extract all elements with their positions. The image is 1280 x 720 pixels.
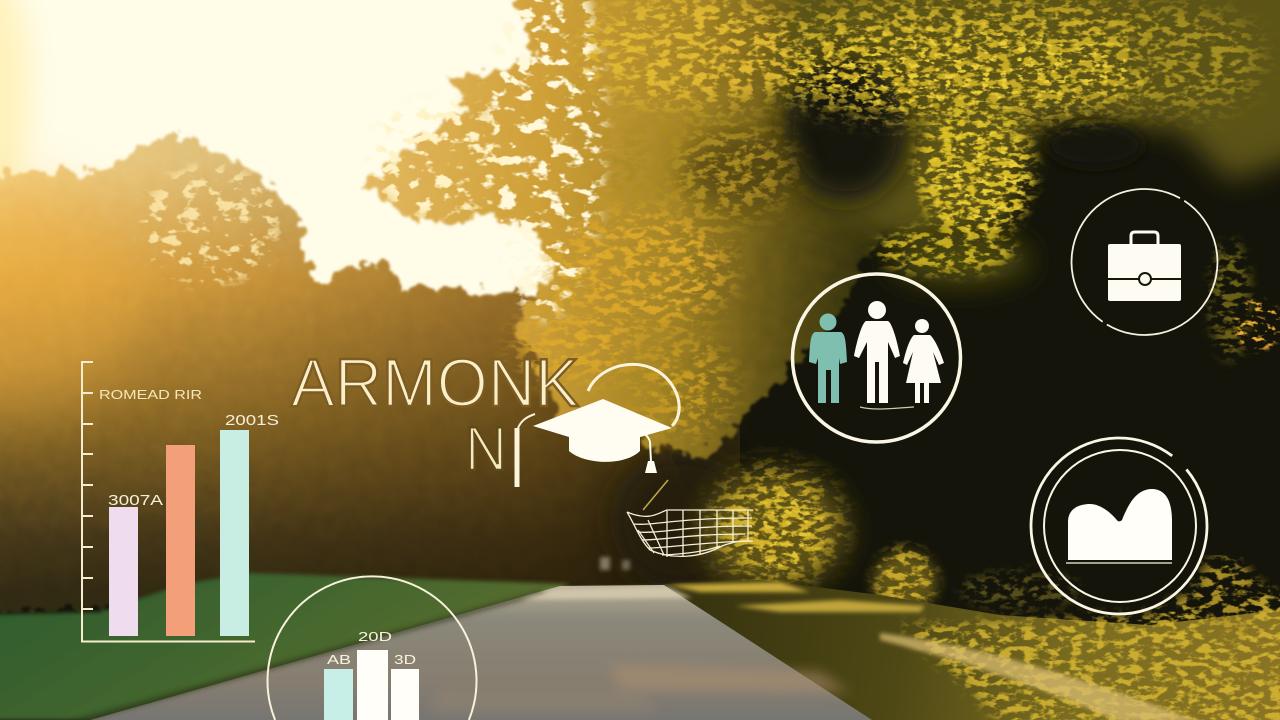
circle: small bar chart	[267, 576, 476, 720]
road dark edge	[70, 590, 547, 720]
sun flare at left edge	[0, 0, 30, 210]
mini bar: mint	[324, 669, 353, 720]
bar chart	[82, 362, 279, 642]
right woodland dark base	[700, 0, 1280, 720]
mini label left: AB	[327, 652, 351, 667]
road	[90, 585, 872, 720]
title: NY: N	[465, 415, 507, 484]
figure: teal adult	[809, 314, 847, 403]
icon: family circle	[792, 274, 960, 442]
title: ARMONK: ARMONK	[291, 345, 579, 421]
mini bar: right	[391, 669, 419, 720]
road highlights	[430, 587, 850, 712]
bar: mint	[220, 430, 249, 636]
figure: white adult	[854, 301, 900, 403]
icon: area chart circle	[995, 402, 1243, 650]
bar: orange	[166, 445, 195, 636]
sunlit grass	[900, 555, 1280, 720]
road vanishing point	[600, 557, 630, 570]
title: NY	[465, 414, 535, 487]
foliage clusters	[515, 0, 1260, 612]
bar: lilac	[109, 507, 138, 636]
icon: wire net chart	[627, 480, 753, 557]
figure: white girl	[903, 319, 944, 403]
mini bar: centre	[357, 650, 388, 720]
chart axes and ticks	[82, 362, 255, 642]
bar label 3: 2001S	[225, 412, 279, 429]
canopy olive base	[703, 0, 1280, 612]
chart title: ROMEAD RIR	[99, 387, 202, 402]
right crown over sky	[360, 0, 1040, 460]
icon: briefcase circle	[1044, 161, 1245, 363]
bright leaves	[734, 20, 1280, 572]
left grass	[0, 573, 570, 720]
icon: graduation cap	[533, 364, 679, 473]
left forest silhouette	[0, 135, 750, 610]
mini label right: 3D	[394, 652, 416, 667]
sky gaps through leaves	[140, 0, 605, 320]
bar label 1: 3007A	[108, 492, 163, 509]
sky	[0, 0, 760, 340]
mini label centre: 20D	[358, 629, 392, 644]
canopy shadows	[680, 58, 1143, 206]
right grass	[664, 580, 1280, 720]
sunlit grass streaks	[668, 582, 1200, 720]
